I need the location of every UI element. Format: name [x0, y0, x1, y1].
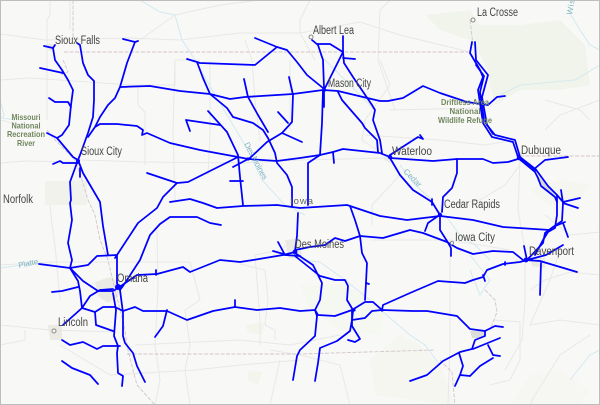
rail hubs	[76, 88, 528, 312]
rail lines: Cedar Rapids feeders	[442, 159, 457, 212]
city labels: Omaha	[117, 273, 148, 285]
city labels: Cedar Rapids	[444, 199, 500, 211]
city labels: Sioux City	[81, 146, 122, 158]
rail lines: Omaha area	[39, 264, 82, 325]
park label: Driftless Area National Wildlife Refuge: National	[450, 106, 480, 116]
city labels: Iowa City	[455, 232, 495, 244]
city labels: Lincoln	[58, 317, 88, 329]
city labels: Mason City	[328, 78, 371, 90]
city labels: Norfolk	[3, 194, 33, 206]
city labels: Des Moines	[295, 239, 344, 251]
park label: Missouri National Recreation River: Recreation	[7, 129, 45, 139]
park label: Driftless Area National Wildlife Refuge: Wildlife Refuge	[438, 115, 492, 125]
rail lines: north central	[323, 86, 505, 105]
park label: Driftless Area National Wildlife Refuge	[438, 97, 492, 125]
park label: Missouri National Recreation River: Missouri	[12, 112, 40, 122]
rail lines: Des Moines area	[273, 213, 298, 255]
river labels: Des Moines	[242, 141, 269, 181]
rail lines: Davenport and Dubuque	[524, 245, 577, 295]
park label: Driftless Area National Wildlife Refuge: Driftless Area	[441, 97, 489, 107]
park label: Missouri National Recreation River	[7, 112, 45, 148]
city labels: Albert Lea	[313, 25, 354, 37]
river labels	[18, 0, 577, 270]
railroad network	[39, 36, 580, 386]
city labels: Sioux Falls	[55, 35, 100, 47]
city labels: La Crosse	[477, 7, 518, 19]
urban areas	[45, 44, 555, 340]
rail lines: central corridor	[170, 199, 550, 230]
park label: Missouri National Recreation River: River	[17, 138, 36, 148]
river labels: Cedar	[402, 167, 424, 189]
city labels: Waterloo	[392, 146, 432, 158]
forest shading	[245, 10, 590, 405]
state label: Iowa: Iowa	[290, 196, 314, 207]
city markers	[52, 18, 475, 333]
city labels: Davenport	[529, 246, 575, 258]
rail lines: southeast	[348, 310, 360, 342]
rail lines: northwest	[44, 45, 73, 138]
city labels: Dubuque	[521, 145, 561, 157]
park label: Missouri National Recreation River: National	[12, 120, 40, 130]
city labels	[3, 7, 575, 329]
river labels: Platte	[18, 257, 40, 270]
